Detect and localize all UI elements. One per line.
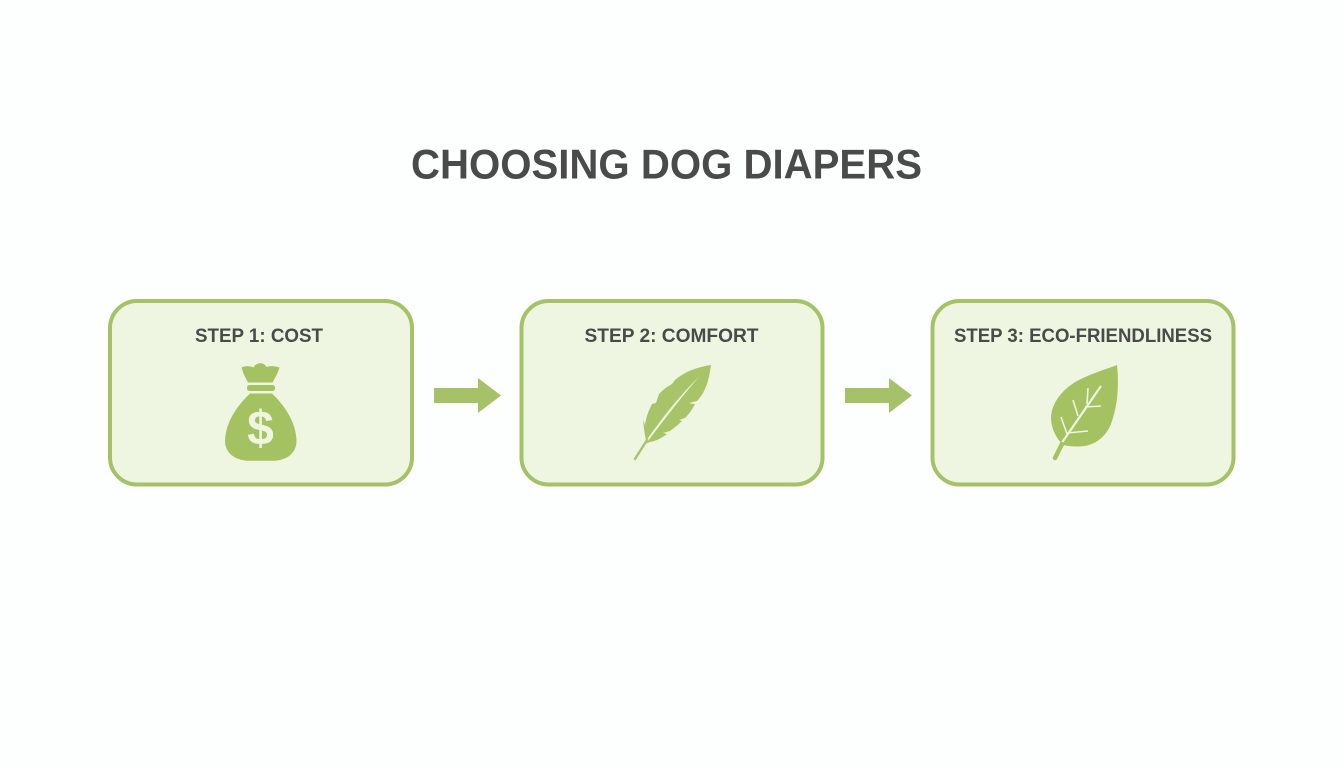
icon glyph: dollar sign: $ <box>247 402 274 456</box>
arrow: step 1 to step 2 <box>434 378 501 413</box>
heading: step 2: STEP 2: COMFORT <box>584 325 759 347</box>
icon: leaf <box>1051 365 1118 458</box>
heading: step 3: STEP 3: ECO-FRIENDLINESS <box>954 325 1212 347</box>
heading: step 1: STEP 1: COST <box>195 325 323 347</box>
arrow: step 2 to step 3 <box>845 378 912 413</box>
panel: step 3 eco-friendliness <box>932 301 1234 484</box>
title: CHOOSING DOG DIAPERS <box>411 140 922 188</box>
panel: step 2 comfort <box>522 301 822 484</box>
panel: step 1 cost <box>110 301 412 484</box>
icon: money bag <box>225 363 296 461</box>
icon: feather <box>635 365 711 459</box>
